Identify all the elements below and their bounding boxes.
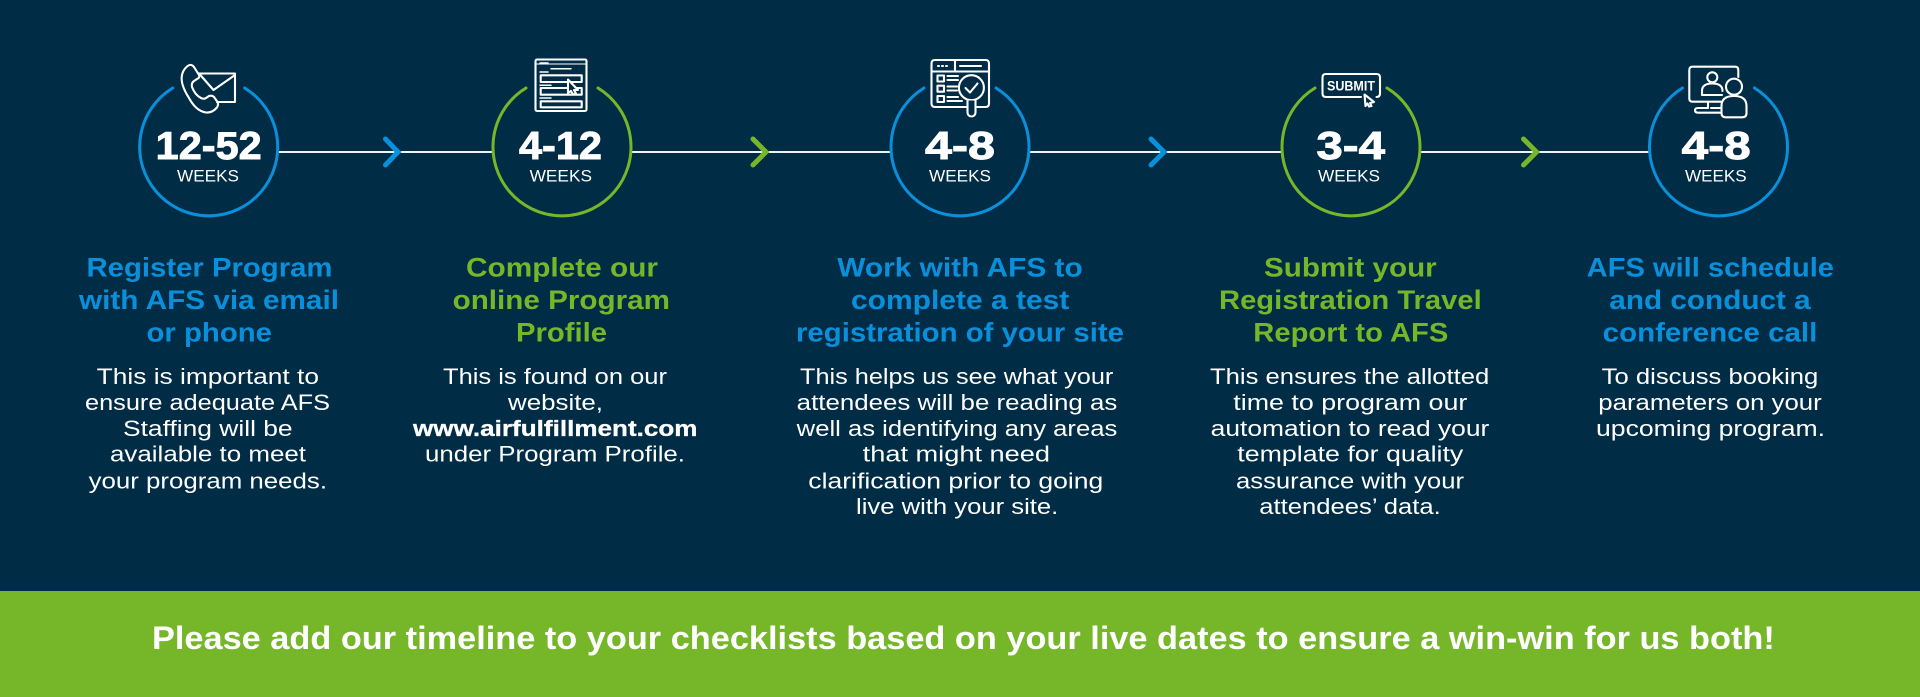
text block: step 4: automation to read your — [1211, 416, 1490, 441]
icon: submit button — [1322, 74, 1380, 106]
duration 4-12 weeks — [519, 125, 602, 185]
footer message: Please add our timeline to your checklists based on your live dates to ensure a win-win for us both! — [152, 620, 1775, 656]
circle ring 3 — [891, 88, 1029, 216]
circle ring 1 — [140, 88, 278, 216]
heading: step 2: Complete our — [466, 253, 658, 283]
heading: step 4: Submit your — [1264, 253, 1437, 283]
heading: step 5: and conduct a — [1609, 285, 1811, 315]
duration 4-8 weeks — [925, 125, 995, 185]
text block: step 1: ensure adequate AFS — [85, 390, 330, 415]
text block: step 3: live with your site. — [856, 494, 1058, 519]
duration 4-8 weeks: WEEKS — [1685, 166, 1747, 185]
text block: step 5: parameters on your — [1598, 390, 1822, 415]
arrow 2 — [753, 139, 766, 165]
duration 3-4 weeks: 3-4 — [1316, 125, 1385, 168]
heading: step 3: complete a test — [851, 285, 1069, 315]
heading: step 5 — [1587, 253, 1834, 348]
text block: step 3 — [796, 364, 1117, 519]
timeline connector lines and arrows — [279, 139, 1649, 165]
text block: step 2: website, — [507, 390, 603, 415]
heading: step 5: conference call — [1603, 318, 1817, 348]
duration 4-8 weeks: 4-8 — [1682, 125, 1751, 168]
circle ring 5 — [1650, 88, 1788, 216]
heading: step 1: Register Program — [86, 253, 332, 283]
duration 4-8 weeks: WEEKS — [929, 166, 991, 185]
text block: step 5: To discuss booking — [1602, 364, 1818, 389]
icon: online form — [536, 60, 586, 111]
text block: step 1: Staffing will be — [123, 416, 293, 441]
text block: step 4: This ensures the allotted — [1210, 364, 1489, 389]
heading: step 5: AFS will schedule — [1587, 253, 1834, 283]
icon: submit button: SUBMIT — [1327, 78, 1375, 94]
duration 4-12 weeks: WEEKS — [530, 166, 592, 185]
text block: step 4 — [1210, 364, 1490, 519]
heading: step 4: Registration Travel — [1219, 285, 1482, 315]
heading: step 3: registration of your site — [796, 318, 1124, 348]
arrow 4 — [1524, 139, 1536, 165]
text block: step 4: attendees’ data. — [1259, 494, 1441, 519]
heading: step 4 — [1219, 253, 1482, 348]
icon: checklist with magnifier — [932, 60, 989, 116]
text block: step 4: template for quality — [1237, 442, 1464, 467]
text block: step 1: This is important to — [97, 364, 319, 389]
duration 4-12 weeks: 4-12 — [519, 125, 602, 168]
panel: step 3 test registration — [796, 60, 1124, 519]
text block: step 3: This helps us see what your — [800, 364, 1114, 389]
duration 4-8 weeks — [1682, 125, 1751, 185]
duration 4-8 weeks: 4-8 — [925, 125, 995, 168]
panel: step 1 register — [78, 65, 339, 493]
duration 3-4 weeks: WEEKS — [1318, 166, 1380, 185]
icon: video conference — [1689, 67, 1746, 117]
text block: step 3: that might need — [863, 442, 1050, 467]
panel: step 2 program profile — [412, 60, 698, 467]
circle ring 4 — [1282, 88, 1420, 216]
text block: step 2: under Program Profile. — [425, 442, 685, 467]
text block: step 3: clarification prior to going — [808, 468, 1103, 493]
duration 12-52 weeks: WEEKS — [177, 166, 239, 185]
duration 12-52 weeks — [156, 125, 262, 185]
arrow 1 — [386, 139, 398, 165]
heading: step 1 — [78, 253, 339, 348]
circle ring 2 — [493, 88, 631, 216]
heading: step 1: with AFS via email — [78, 285, 339, 315]
text block: step 1: available to meet — [110, 442, 307, 467]
heading: step 1: or phone — [146, 318, 272, 348]
heading: step 2: online Program — [453, 285, 670, 315]
heading: step 3 — [796, 253, 1124, 348]
panel: step 4 travel report — [1210, 74, 1490, 519]
text block: step 2 — [412, 364, 698, 467]
text block: step 1: your program needs. — [89, 468, 327, 493]
text block: step 5 — [1596, 364, 1825, 441]
text block: step 1 — [85, 364, 330, 493]
duration 3-4 weeks — [1316, 125, 1385, 185]
heading: step 4: Report to AFS — [1253, 318, 1448, 348]
text block: step 4: time to program our — [1233, 390, 1468, 415]
text block: step 5: upcoming program. — [1596, 416, 1825, 441]
text block: step 3: attendees will be reading as — [797, 390, 1117, 415]
text block: step 3: well as identifying any areas — [796, 416, 1117, 441]
duration 12-52 weeks: 12-52 — [156, 125, 262, 168]
icon: phone and envelope — [182, 65, 235, 113]
arrow 3 — [1151, 139, 1164, 165]
text block: step 2: This is found on our — [443, 364, 668, 389]
text block: step 2: www.airfulfillment.com — [412, 416, 698, 441]
footer banner — [0, 591, 1920, 697]
heading: step 2: Profile — [516, 318, 607, 348]
heading: step 2 — [453, 253, 670, 348]
text block: step 4: assurance with your — [1236, 468, 1465, 493]
heading: step 3: Work with AFS to — [837, 253, 1083, 283]
panel: step 5 conference call — [1587, 67, 1834, 441]
